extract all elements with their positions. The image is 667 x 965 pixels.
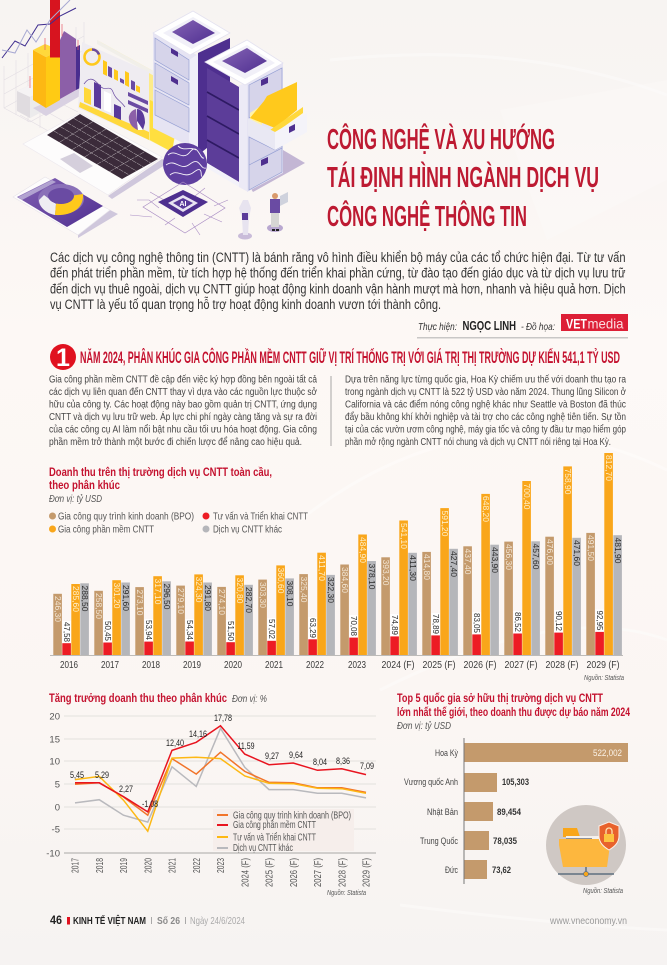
icon: server cabinets	[153, 11, 307, 192]
bars 2025	[422, 508, 459, 655]
year axis labels: 2021	[265, 660, 283, 671]
line chart: growth by segment	[46, 712, 376, 887]
data labels: 8,36	[336, 756, 350, 767]
bars 2017: 301,20	[112, 582, 122, 609]
x axis labels: 2026 (F)	[289, 858, 300, 887]
bars 2018: 317,10	[153, 578, 163, 605]
heading: growth line chart: Tăng trưởng doanh thu theo phân khúc	[49, 693, 227, 705]
bars 2022: 322,30	[326, 577, 336, 603]
bars 2025: 591,20	[440, 510, 450, 537]
bars 2019: 279,10	[176, 588, 186, 614]
bars 2026: 443,90	[490, 547, 500, 573]
icon: secure folder	[546, 805, 626, 885]
data labels: 9,64	[289, 750, 303, 761]
legend: line chart: Dịch vụ CNTT khác	[233, 843, 293, 854]
bars 2029	[586, 453, 623, 655]
year axis labels: 2024 (F)	[382, 660, 414, 671]
bars 2023: 484,90	[358, 537, 368, 563]
bars 2016: 288,50	[80, 586, 90, 612]
icon: smartphone with donut chart	[13, 177, 118, 238]
bars 2028: 471,60	[572, 540, 582, 566]
line: IT consulting and implementation	[75, 757, 366, 831]
year axis labels: 2020	[224, 660, 242, 671]
x axis labels: 2022	[192, 858, 203, 873]
bars 2027: 456,30	[504, 544, 514, 570]
year axis labels: 2023	[348, 660, 366, 671]
data labels: 9,27	[265, 751, 279, 762]
y axis labels: 20	[49, 712, 60, 722]
icon: 3D bar chart	[2, 0, 84, 132]
bars 2026	[463, 494, 500, 655]
bars 2026: 648,20	[481, 496, 491, 522]
intro paragraph: vụ CNTT là yếu tố quan trọng hỗ trợ hoạt động kinh doanh vươn tới thành công.	[50, 297, 441, 312]
text block: left column: Gia công phần mềm CNTT đề cập đến việc ký hợp đồng bên ngoài tất cả	[49, 374, 317, 386]
bars 2028: 476,00	[545, 539, 555, 565]
year axis labels: 2018	[142, 660, 160, 671]
legend: revenue chart: Dịch vụ CNTT khác	[213, 524, 282, 536]
data labels: 8,04	[313, 757, 327, 768]
bars 2018	[135, 576, 172, 655]
bars 2025: 427,40	[449, 551, 459, 577]
bars 2021: 360,60	[276, 568, 286, 594]
x axis labels: 2020	[143, 858, 154, 873]
bar chart: top 5 countries: 73,62	[492, 865, 511, 875]
data labels: 2,27	[119, 784, 133, 795]
bars 2028: 90,12	[554, 611, 564, 631]
x axis labels: 2027 (F)	[313, 858, 324, 887]
bars 2019: 324,30	[194, 576, 204, 603]
bars 2024: 74,89	[390, 615, 400, 635]
bars 2019: 291,80	[203, 585, 213, 611]
bar chart: top 5 countries: Nhật Bản	[427, 807, 458, 818]
bars 2016: 47,58	[62, 622, 72, 642]
legend: revenue chart: Gia công phần mềm CNTT	[58, 524, 154, 536]
bars 2026: 83,05	[472, 613, 482, 633]
data labels: 5,45	[70, 770, 84, 781]
y axis labels: -5	[52, 824, 60, 836]
bars 2019	[176, 574, 213, 655]
legend: revenue chart: Gia công quy trình kinh doanh (BPO)	[58, 512, 194, 522]
bars 2022: 325,40	[299, 576, 309, 603]
year axis labels: 2022	[306, 660, 324, 671]
bar chart: top 5 countries: Vương quốc Anh	[404, 777, 458, 788]
source note: line chart: Nguồn: Statista	[327, 888, 366, 897]
legend: line chart: Tư vấn và Triển khai CNTT	[233, 832, 316, 844]
year axis labels: 2019	[183, 660, 201, 671]
bars 2016	[53, 583, 90, 655]
x axis labels: 2021	[168, 858, 178, 873]
footer: KINH TẾ VIỆT NAM	[73, 914, 146, 927]
line: software outsourcing	[75, 726, 366, 812]
bars 2020	[217, 575, 254, 655]
title: CÔNG NGHỆ THÔNG TIN	[327, 199, 527, 233]
data labels: 14,16	[189, 729, 207, 740]
bar chart: top 5 countries: Hoa Kỳ	[435, 748, 458, 759]
text block: left column: của các công cụ AI làm nổi bật nhu cầu tối ưu hóa hoạt động. Gia công	[49, 424, 317, 436]
x axis labels: 2024 (F)	[240, 858, 251, 887]
x axis labels	[70, 858, 372, 887]
bars 2023	[340, 534, 377, 655]
bars 2017: 258,50	[94, 593, 104, 619]
year axis labels: 2027 (F)	[504, 660, 538, 671]
bars 2027	[504, 481, 541, 655]
logo: VETmedia: media	[588, 316, 624, 332]
bars 2027: 86,52	[513, 612, 523, 632]
data labels: -1,08	[142, 799, 158, 810]
legend: revenue chart	[49, 510, 308, 536]
bars 2018: 273,10	[135, 590, 145, 616]
text block: left column: phần mềm trở thành một bước đi chiến lược để nâng cao hiệu quả.	[49, 436, 302, 448]
credit line: - Đồ họa:	[521, 321, 555, 333]
bar chart: top 5 countries: Đức	[445, 865, 458, 876]
icon: person with tablet	[267, 192, 288, 232]
text block: right column	[345, 374, 626, 448]
source note: revenue chart: Nguồn: Statista	[584, 673, 624, 682]
bars 2024: 393,20	[381, 560, 391, 586]
bars 2029: 491,50	[586, 535, 596, 561]
data labels: 17,78	[214, 713, 232, 724]
credit line: NGỌC LINH	[462, 318, 516, 333]
footer: Ngày 24/6/2024	[190, 915, 245, 927]
bar chart: top 5 countries: 105,303	[502, 777, 529, 787]
bars 2029: 92,95	[595, 610, 605, 631]
year axis labels: 2017	[101, 660, 119, 671]
x axis labels: 2019	[119, 858, 130, 873]
text block: left column: các dịch vụ liên quan đến CNTT thay vì dựa vào các nguồn lực thuộc sở	[49, 386, 317, 398]
section heading with number badge	[50, 344, 620, 372]
bars 2020: 282,70	[244, 587, 254, 613]
footer: Số 26	[157, 915, 180, 927]
bar chart: top 5 countries: Trung Quốc	[420, 836, 458, 847]
bar chart: top 5 countries: 78,035	[493, 836, 517, 846]
data labels: 12,40	[166, 738, 184, 749]
y axis labels: 0	[55, 802, 60, 814]
text block: left column: hữu của công ty. Các hoạt động này bao gồm quản trị CNTT, ứng dụng	[49, 399, 317, 411]
icon: robot figure	[238, 200, 252, 240]
heading: global revenue chart: theo phân khúc	[49, 480, 120, 492]
source note: top 5 chart: Nguồn: Statista	[583, 886, 623, 895]
text block: left column: CNTT và dịch vụ lưu trữ web. Áp lực chi phí ngày càng tăng và sự ra đời	[49, 410, 317, 423]
bars 2022: 63,29	[308, 618, 318, 638]
legend: revenue chart: Tư vấn và Triển khai CNTT	[213, 510, 308, 522]
credit line: Thực hiện:	[418, 321, 457, 333]
bars 2028: 758,90	[563, 468, 573, 495]
x axis labels: 2018	[95, 858, 106, 873]
credit line	[417, 314, 628, 338]
data labels: 5,29	[95, 770, 109, 781]
data labels: 7,09	[360, 761, 374, 772]
bars 2021: 303,30	[258, 582, 268, 608]
y axis labels	[46, 712, 60, 860]
bar chart: top 5 countries: 522,002	[593, 748, 622, 759]
legend: line chart: Gia công quy trình kinh doanh (BPO)	[233, 810, 351, 822]
bars 2020: 320,80	[235, 578, 245, 604]
x axis labels: 2029 (F)	[362, 858, 372, 887]
x axis labels: 2028 (F)	[337, 858, 348, 887]
bars 2023: 378,10	[367, 564, 377, 590]
line: other IT services	[75, 728, 366, 822]
bars 2022	[299, 553, 336, 655]
heading: top 5 countries chart: Đơn vị: tỷ USD	[397, 720, 451, 732]
y axis labels: 5	[55, 780, 60, 790]
icon: AI brain and chip: AI	[180, 201, 187, 208]
year axis labels: 2029 (F)	[586, 660, 620, 671]
bars 2027: 457,60	[531, 544, 541, 570]
line: business process outsourcing	[75, 752, 366, 815]
bars 2023: 384,60	[340, 567, 350, 593]
bar chart: revenue by segment 2016-2029	[50, 453, 623, 671]
bars 2028	[545, 466, 582, 655]
icon: AI brain and chip	[130, 143, 228, 235]
heading: growth line chart: Đơn vị: %	[232, 694, 267, 705]
section heading with number badge: 1	[56, 344, 70, 372]
text block: left column	[49, 374, 317, 448]
bars 2024: 411,30	[408, 555, 418, 581]
data labels: 11,59	[238, 741, 254, 752]
footer: 46	[50, 913, 62, 927]
footer	[50, 913, 627, 927]
icon: laptop	[23, 40, 184, 199]
year axis labels: 2016	[60, 660, 78, 671]
bars 2029: 812,70	[604, 455, 614, 481]
intro paragraph	[50, 250, 626, 312]
logo: VETmedia	[561, 314, 628, 332]
bars 2017: 50,45	[103, 621, 113, 641]
bars 2021: 57,02	[267, 619, 277, 639]
bars 2027: 700,40	[522, 484, 532, 510]
bars 2019: 54,34	[185, 620, 195, 640]
year axis labels: 2026 (F)	[464, 660, 496, 671]
bars 2026: 437,40	[463, 548, 473, 575]
bars 2021: 308,10	[285, 580, 295, 607]
data labels	[70, 713, 374, 810]
bars 2029: 481,90	[613, 538, 623, 564]
heading: global revenue chart	[49, 467, 272, 505]
title	[327, 122, 599, 233]
bar chart: top 5 countries: 89,454	[497, 807, 521, 817]
bars 2016: 285,60	[71, 586, 81, 612]
heading: top 5 countries chart	[397, 693, 630, 732]
year axis labels	[60, 660, 620, 671]
x axis labels: 2017	[70, 858, 82, 873]
year axis labels: 2028 (F)	[546, 660, 578, 671]
bars 2021	[258, 565, 295, 655]
bars 2024: 541,10	[399, 523, 409, 549]
bars 2017	[94, 580, 131, 655]
bar chart: top 5 countries	[404, 738, 628, 884]
y axis labels: 15	[49, 734, 60, 746]
bars 2020: 274,10	[217, 589, 227, 615]
bars 2025: 414,80	[422, 554, 432, 580]
bars 2025: 78,89	[431, 614, 441, 634]
bars 2016: 246,30	[53, 596, 63, 622]
footer: www.vneconomy.vn	[549, 915, 627, 927]
x axis labels: 2023	[216, 858, 227, 873]
logo: VETmedia: VET	[566, 316, 587, 332]
x axis labels: 2025 (F)	[264, 858, 276, 887]
hero illustration: data center, laptop, phone and AI chip	[2, 0, 307, 240]
heading: top 5 countries chart: Top 5 quốc gia sở hữu thị trường dịch vụ CNTT	[397, 693, 603, 705]
heading: global revenue chart: Đơn vị: tỷ USD	[49, 493, 102, 505]
y axis labels: 10	[49, 756, 60, 768]
y axis labels: -10	[46, 848, 60, 860]
year axis labels: 2025 (F)	[422, 660, 456, 671]
bars 2020: 51,50	[226, 621, 236, 641]
bars 2018: 53,94	[144, 620, 154, 640]
legend: line chart	[213, 809, 354, 854]
legend: line chart: Gia công phần mềm CNTT	[233, 819, 316, 831]
heading: global revenue chart: Doanh thu trên thị trường dịch vụ CNTT toàn cầu,	[49, 467, 272, 479]
bars 2018: 296,50	[162, 584, 172, 610]
bars 2022: 411,70	[317, 555, 327, 581]
bars 2023: 70,08	[349, 616, 359, 636]
bars 2024	[381, 520, 418, 655]
bars 2017: 291,60	[121, 585, 131, 611]
